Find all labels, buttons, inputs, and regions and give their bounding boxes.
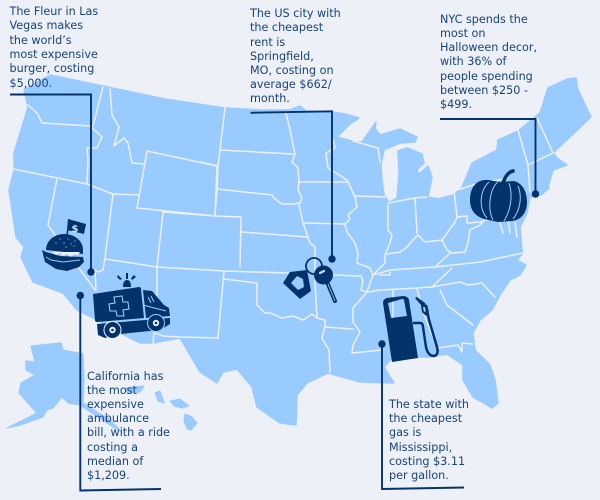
callout: Halloween xyxy=(440,13,537,111)
callout text: rent: Springfield, xyxy=(250,50,314,63)
callout text: ambulance: California has xyxy=(87,370,164,383)
callout text: burger: $5,000. xyxy=(10,77,52,90)
callout text: Halloween: Halloween decor, xyxy=(440,41,537,54)
callout text: ambulance: $1,209. xyxy=(87,469,130,482)
callout text: burger: Vegas makes xyxy=(10,19,83,32)
callout text: Halloween: $499. xyxy=(440,98,472,111)
callout text: Halloween: with 36% of xyxy=(440,55,508,68)
icon: burger with dollar flag: $ xyxy=(72,224,78,235)
callout text: gas: costing $3.11 xyxy=(389,455,465,468)
callout text: gas: gas is xyxy=(389,426,421,439)
callout text: rent: The US city with xyxy=(249,7,341,20)
callout: rent xyxy=(249,7,341,105)
callout text: Halloween: NYC spends the xyxy=(440,13,528,26)
callout text: Halloween: most on xyxy=(440,27,485,40)
leader line: burger xyxy=(10,94,95,276)
callout: gas xyxy=(388,398,469,482)
icon: pumpkin xyxy=(470,171,527,222)
callout text: gas: the cheapest xyxy=(389,412,463,425)
callout text: gas: The state with xyxy=(388,398,469,411)
map: contiguous states landmass xyxy=(9,75,591,425)
leader line: ambulance xyxy=(77,292,161,490)
map: United States xyxy=(7,75,591,432)
callout text: rent: month. xyxy=(250,92,290,105)
callout text: rent: the cheapest xyxy=(250,21,324,34)
callout text: ambulance: median of xyxy=(87,455,144,468)
callout text: ambulance: ambulance xyxy=(87,412,149,425)
callout text: burger: burger, costing xyxy=(10,62,94,75)
callout text: burger: The Fleur in Las xyxy=(8,5,98,18)
leader line: gas xyxy=(378,340,464,489)
icon: gas pump xyxy=(383,296,438,362)
callout: burger xyxy=(8,5,98,90)
icon: burger with dollar flag xyxy=(42,219,86,271)
map: Hawaii xyxy=(155,391,197,430)
callout text: ambulance: costing a xyxy=(87,441,138,454)
leader line: rent xyxy=(250,111,336,263)
callout: ambulance xyxy=(87,370,170,482)
callout text: rent: MO, costing on xyxy=(250,64,334,77)
callout text: ambulance: bill, with a ride xyxy=(87,426,170,439)
icon: keys on a ring with house tag xyxy=(283,258,335,301)
callout text: rent: average $662/ xyxy=(250,78,332,91)
callout text: Halloween: people spending xyxy=(440,70,533,83)
callout text: ambulance: expensive xyxy=(87,398,144,411)
callout text: burger: most expensive xyxy=(10,48,98,61)
callout text: gas: Mississippi, xyxy=(389,441,452,454)
callout text: gas: per gallon. xyxy=(389,469,449,482)
callout text: burger: the world’s xyxy=(10,34,72,47)
callout text: ambulance: the most xyxy=(87,384,137,397)
callout text: Halloween: between $250 - xyxy=(440,84,528,97)
map: Alaska xyxy=(7,343,144,432)
map: state borders xyxy=(13,87,553,372)
leader line: Halloween xyxy=(440,119,539,198)
icon: ambulance xyxy=(93,273,170,338)
callout text: rent: rent is xyxy=(250,36,285,49)
